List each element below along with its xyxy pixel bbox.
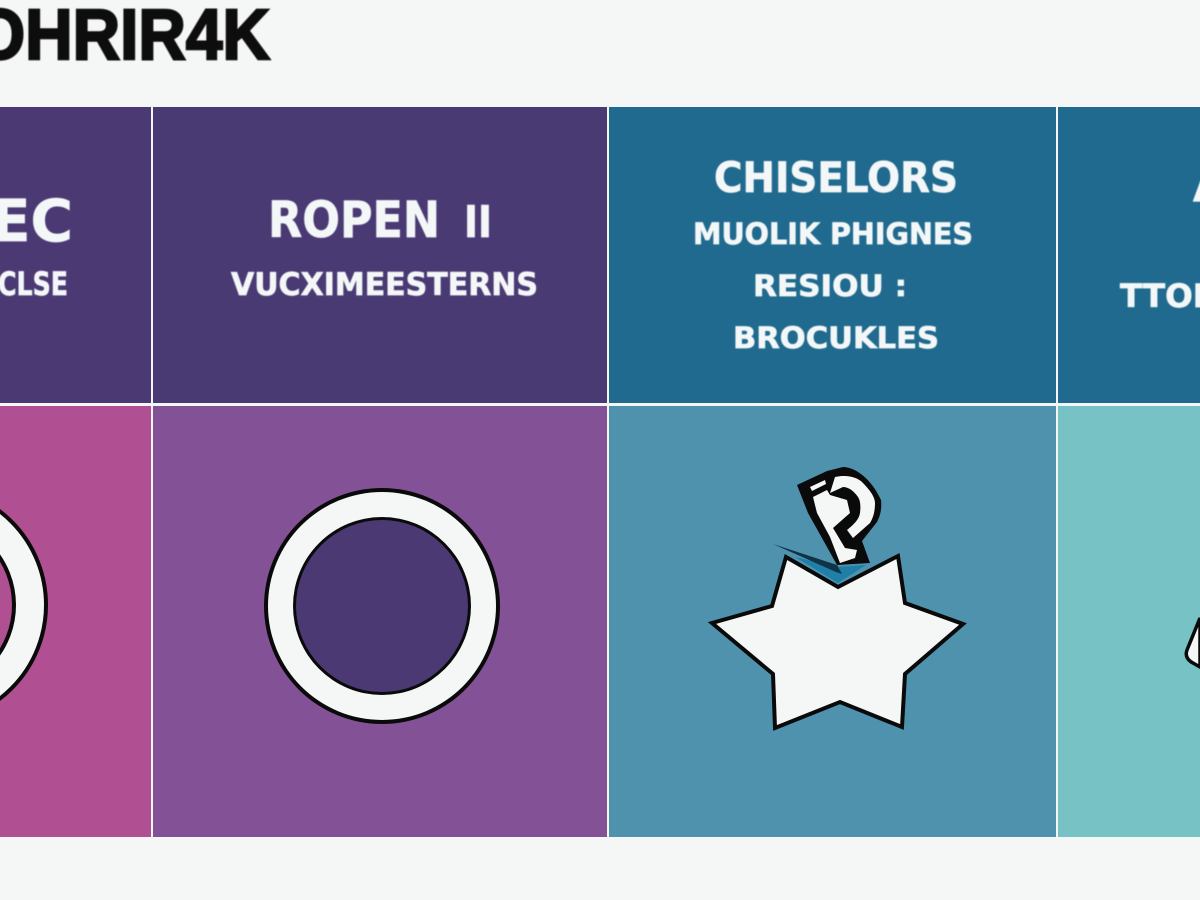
panel: column 4 header [1058, 107, 1200, 403]
panel: column 3 header [609, 107, 1056, 403]
icon: partial white shape [1186, 618, 1200, 667]
panel: column 2 lower [153, 406, 607, 837]
heading: column 3: CHISELORS [714, 153, 958, 202]
text line: column 3: MUOLIK PHIGNES [693, 217, 973, 251]
panel: column 3 lower [609, 406, 1056, 837]
icon: star with hook [712, 467, 963, 728]
text line: column 3: RESIOU : [753, 269, 907, 303]
subheading: column 1: CLSE [0, 265, 68, 303]
panel: column 2 header [153, 107, 607, 403]
heading: column 2: II [464, 197, 492, 248]
panel: column 4 lower [1058, 406, 1200, 837]
icon: ring [264, 488, 500, 724]
panel: column 1 header [0, 107, 151, 403]
panel: column 1 lower [0, 406, 151, 837]
icon: ring cropped [0, 503, 30, 707]
heading: column 2: ROPEN [268, 191, 440, 249]
text line: column 3: BROCUKLES [733, 321, 939, 355]
subheading: column 2: VUCXIMEESTERNS [231, 267, 538, 303]
